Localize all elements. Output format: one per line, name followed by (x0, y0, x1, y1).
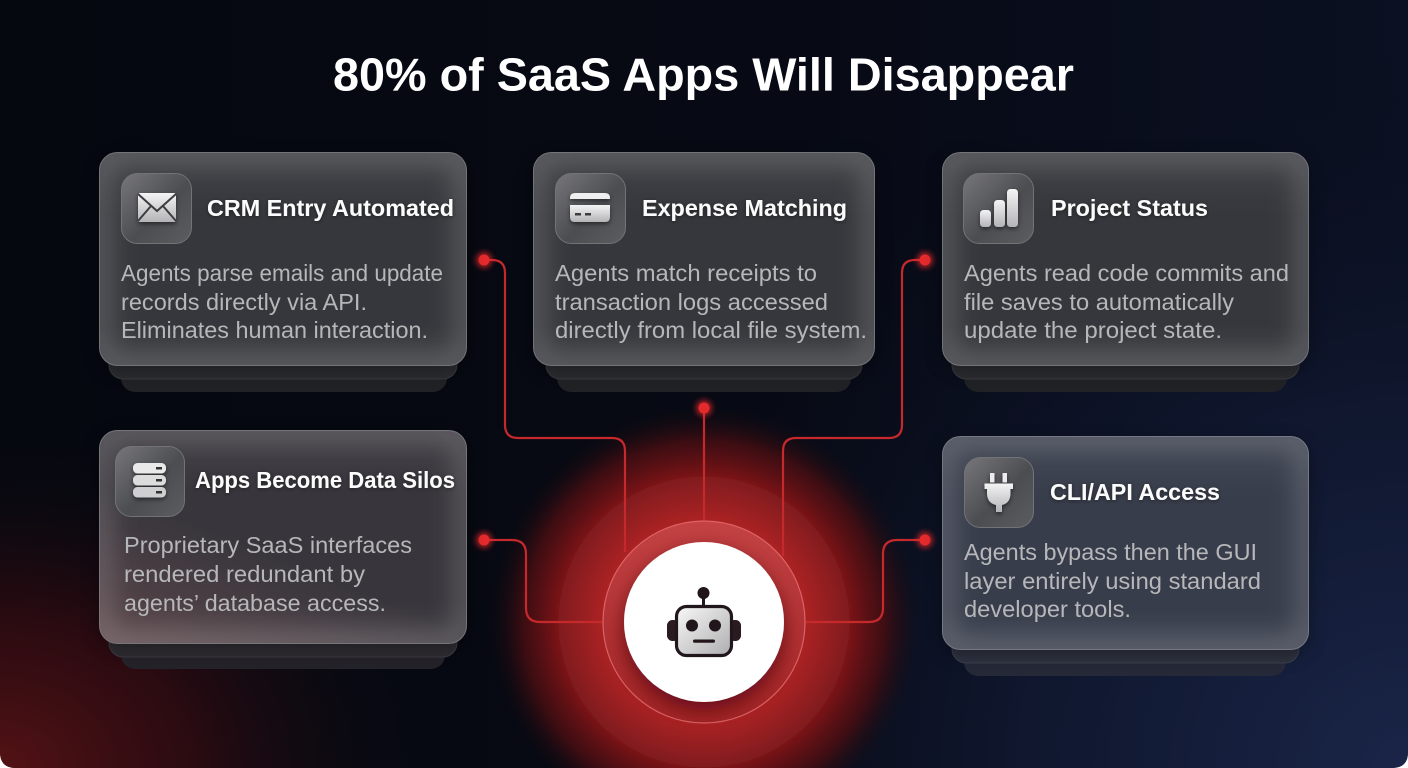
panel: Project Status (942, 152, 1309, 392)
connector: CRM Entry Automated (484, 260, 625, 552)
connector dots (476, 252, 933, 548)
description (124, 532, 412, 616)
description: agents’ database access. (124, 590, 386, 616)
card stack layers (109, 628, 457, 669)
card stack layers (952, 350, 1299, 392)
description: update the project state. (964, 317, 1222, 343)
connector: CLI/API Access (805, 540, 925, 622)
card body (99, 152, 467, 371)
card stack layers (109, 350, 457, 392)
panel: Apps Become Data Silos (99, 430, 467, 669)
description: Agents read code commits and (964, 260, 1289, 286)
card body (942, 152, 1309, 371)
central robot hub (603, 521, 805, 723)
heading: Apps Become Data Silos (195, 467, 455, 493)
panel: Expense Matching (533, 152, 875, 392)
card body (533, 152, 875, 371)
icon: server stack (116, 446, 184, 516)
description: rendered redundant by (124, 561, 366, 587)
description: layer entirely using standard (964, 568, 1261, 594)
heading: Expense Matching (642, 195, 847, 221)
icon: robot (667, 587, 741, 656)
description: file saves to automatically (964, 289, 1234, 315)
description (121, 260, 443, 343)
card body (942, 436, 1309, 655)
description (964, 260, 1289, 343)
heading: CLI/API Access (1050, 479, 1220, 505)
description: Eliminates human interaction. (121, 317, 428, 343)
heading: CRM Entry Automated (207, 195, 454, 221)
description: developer tools. (964, 596, 1131, 622)
hub ring (603, 521, 805, 723)
title: 80% of SaaS Apps Will Disappear (333, 48, 1074, 100)
connector: Apps Become Data Silos (484, 540, 604, 622)
description: Agents match receipts to (555, 260, 817, 286)
icon: plug (964, 458, 1034, 528)
description (964, 539, 1261, 622)
panel: CRM Entry Automated (99, 152, 467, 392)
connector: Project Status (783, 260, 925, 556)
hub white disc (624, 542, 784, 702)
panel: CLI/API Access (942, 436, 1309, 676)
icon: envelope (122, 174, 192, 244)
central red glow (489, 407, 919, 768)
description: transaction logs accessed (555, 289, 828, 315)
description: Agents parse emails and update (121, 260, 443, 286)
connector lines (484, 260, 925, 622)
description (555, 260, 867, 343)
icon: bar chart (964, 174, 1034, 244)
description: Agents bypass then the GUI (964, 539, 1257, 565)
card body (99, 430, 467, 649)
connector: Expense Matching (703, 408, 705, 522)
heading: Project Status (1051, 195, 1208, 221)
description: records directly via API. (121, 289, 367, 315)
card stack layers (546, 350, 862, 392)
icon: credit card (556, 174, 626, 244)
card stack layers (952, 634, 1299, 676)
description: directly from local file system. (555, 317, 867, 343)
description: Proprietary SaaS interfaces (124, 532, 412, 558)
